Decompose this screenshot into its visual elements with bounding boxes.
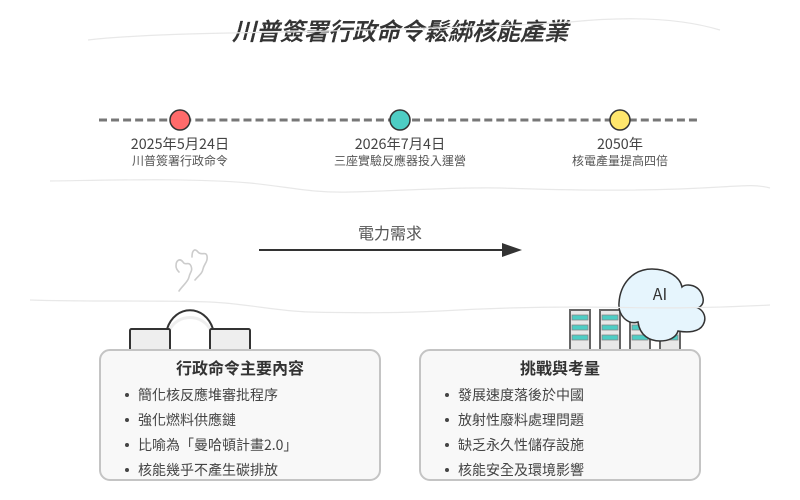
bullet list: 放射性廢料處理問題 [458, 410, 584, 430]
icon: nuclear plant [130, 310, 250, 353]
milestone 2026: 2026年7月4日 [355, 133, 445, 154]
panel heading: 行政命令主要內容 [176, 355, 304, 379]
bullet list: 簡化核反應堆審批程序 [138, 385, 278, 405]
milestone 2050: 2050年 [597, 133, 643, 154]
arrow: electricity demand [259, 220, 522, 257]
icon: AI cloud: AI [653, 281, 667, 305]
milestone 2025 [131, 110, 229, 169]
bullet list: 比喻為「曼哈頓計畫2.0」 [138, 435, 297, 455]
milestone 2050: 核電產量提高四倍 [572, 152, 668, 169]
bullet list [125, 385, 297, 480]
panel: executive order contents [100, 350, 380, 480]
panel: challenges [420, 350, 700, 480]
title: 川普簽署行政命令鬆綁核能產業 [232, 12, 571, 47]
timeline [99, 110, 697, 169]
panel heading: 挑戰與考量 [520, 355, 600, 379]
bullet list [445, 385, 584, 480]
bullet list: 強化燃料供應鏈 [138, 410, 236, 430]
milestone 2025: 2025年5月24日 [131, 133, 229, 154]
icon: data center servers [570, 310, 680, 354]
timeline axis [99, 118, 697, 122]
bullet list: 缺乏永久性儲存設施 [458, 435, 584, 455]
milestone 2026 [334, 110, 466, 169]
milestone 2026: 三座實驗反應器投入運營 [334, 152, 466, 169]
bullet list: 核能安全及環境影響 [458, 460, 584, 480]
milestone 2050 [572, 110, 668, 169]
icon: steam [176, 250, 207, 291]
bullet list: 核能幾乎不產生碳排放 [138, 460, 278, 480]
bullet list: 發展速度落後於中國 [458, 385, 584, 405]
arrow: electricity demand: 電力需求 [358, 220, 422, 244]
icon: AI cloud [619, 269, 705, 341]
milestone 2025: 川普簽署行政命令 [132, 152, 228, 169]
